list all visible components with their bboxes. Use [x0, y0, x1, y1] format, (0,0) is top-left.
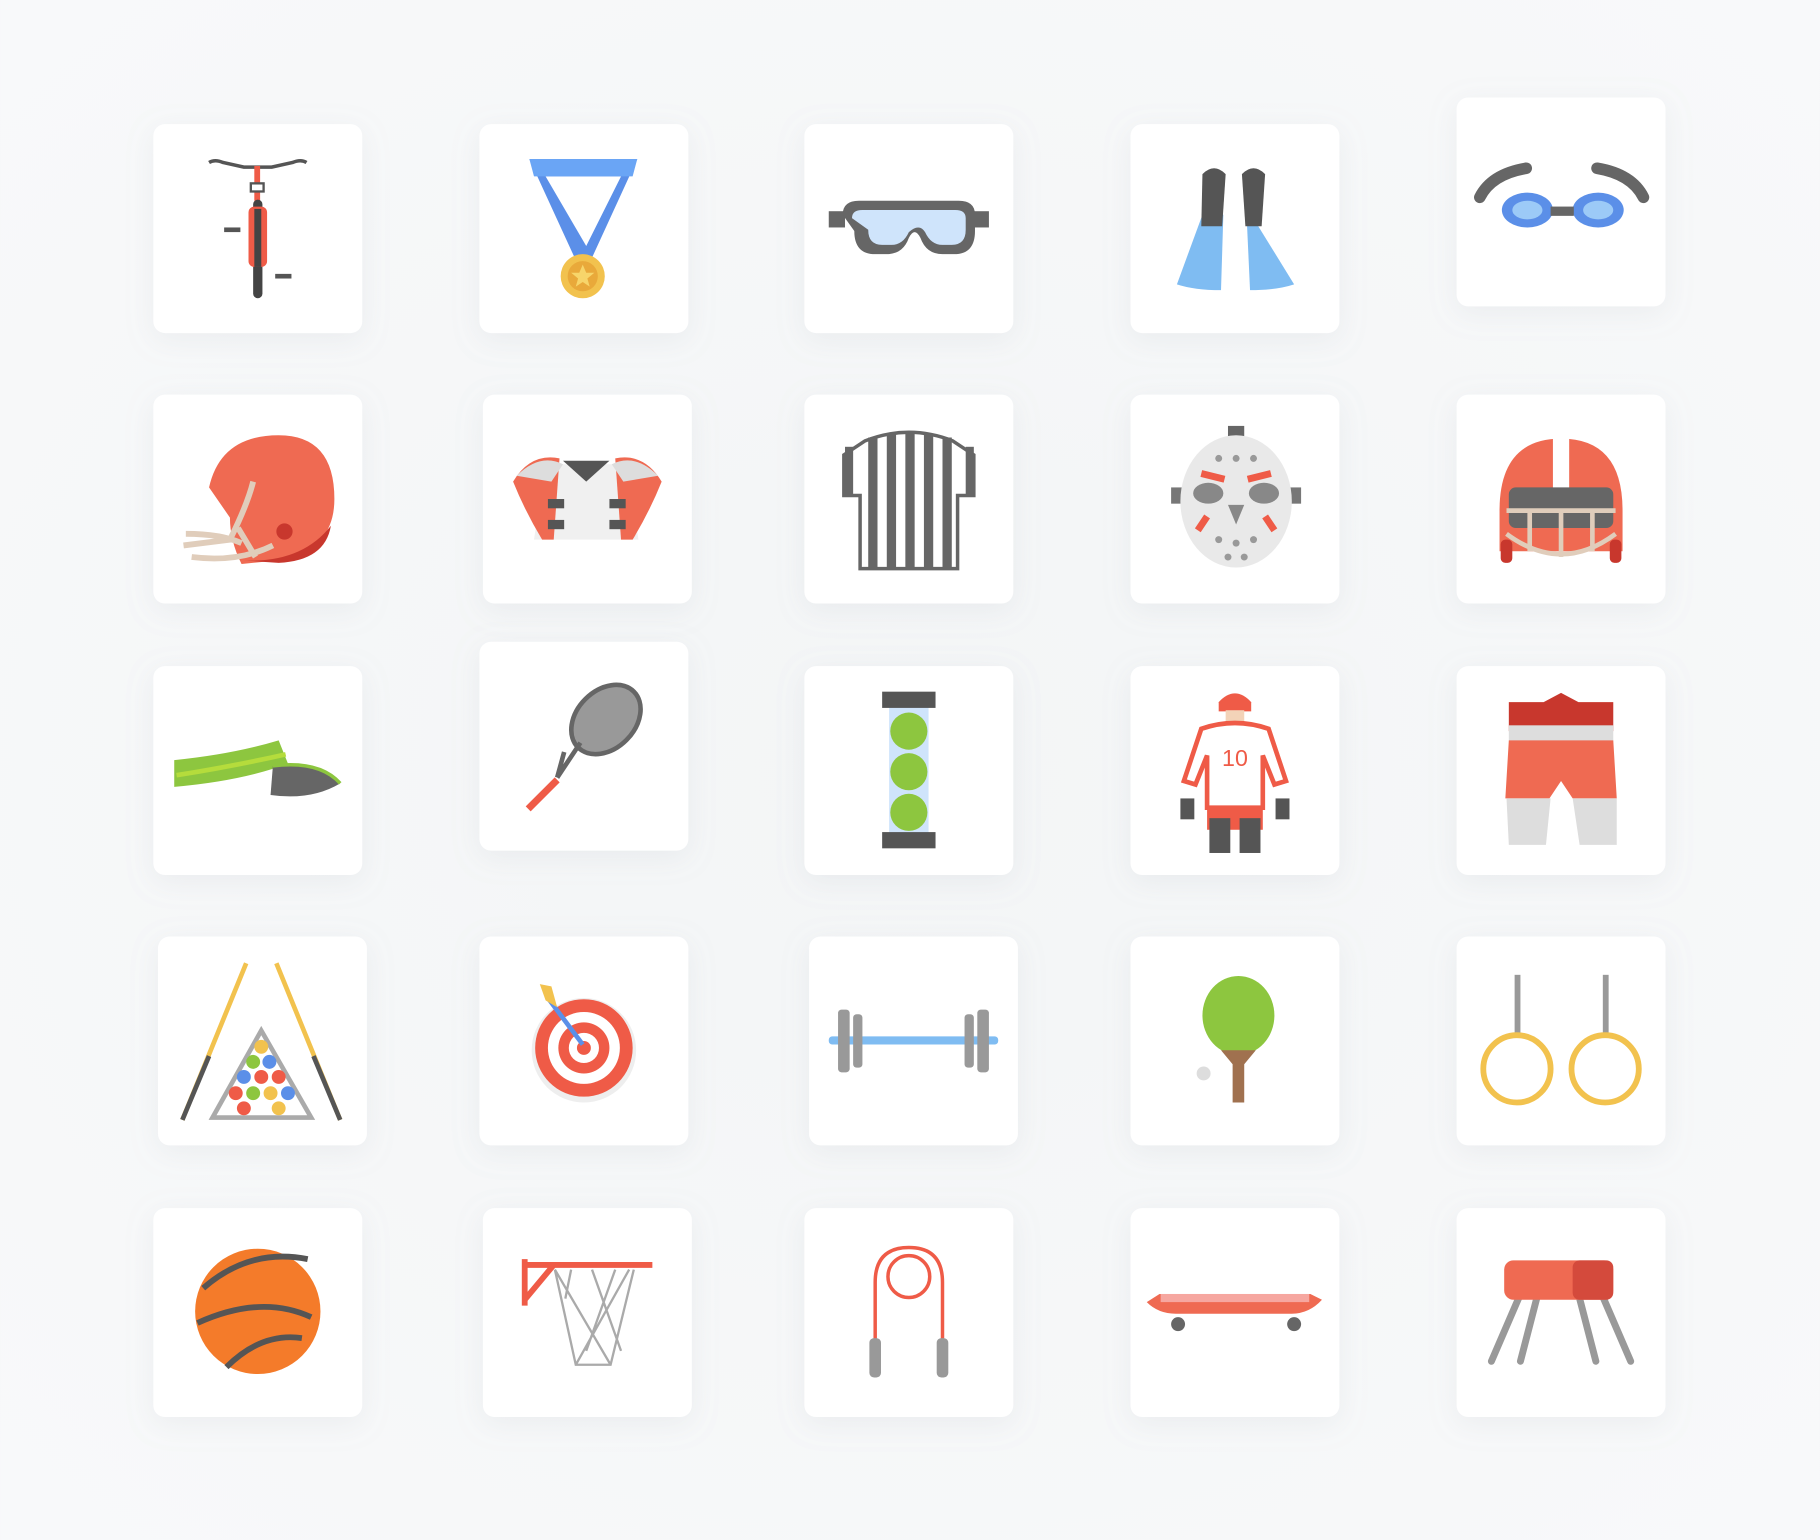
card: bicycle [153, 124, 362, 333]
card: hockey mask [1130, 395, 1339, 603]
card: referee shirt [804, 395, 1013, 603]
card: tennis racket [479, 642, 688, 851]
card: jump rope [804, 1208, 1013, 1417]
card: basketball hoop [483, 1208, 692, 1417]
card: ping pong [1130, 937, 1339, 1145]
card: shoulder pads [483, 395, 692, 603]
card: rings [1457, 937, 1665, 1145]
card: football helmet side [153, 395, 362, 603]
card: football helmet front [1457, 395, 1665, 603]
card: swim goggles [1457, 97, 1665, 306]
card: ski goggles [804, 124, 1013, 333]
card: hockey player: 10 [1222, 745, 1248, 771]
card: barbell [809, 937, 1018, 1145]
card: hockey player [1130, 666, 1339, 875]
card: target [479, 937, 688, 1145]
card: pommel horse [1457, 1208, 1665, 1417]
card: billiards [158, 937, 367, 1145]
card: skateboard [1130, 1208, 1339, 1417]
card: medal [479, 124, 688, 333]
card: basketball [153, 1208, 362, 1417]
card: hockey pants [1457, 666, 1665, 875]
card: visor [153, 666, 362, 875]
card: flippers [1130, 124, 1339, 333]
card: tennis ball tube [804, 666, 1013, 875]
